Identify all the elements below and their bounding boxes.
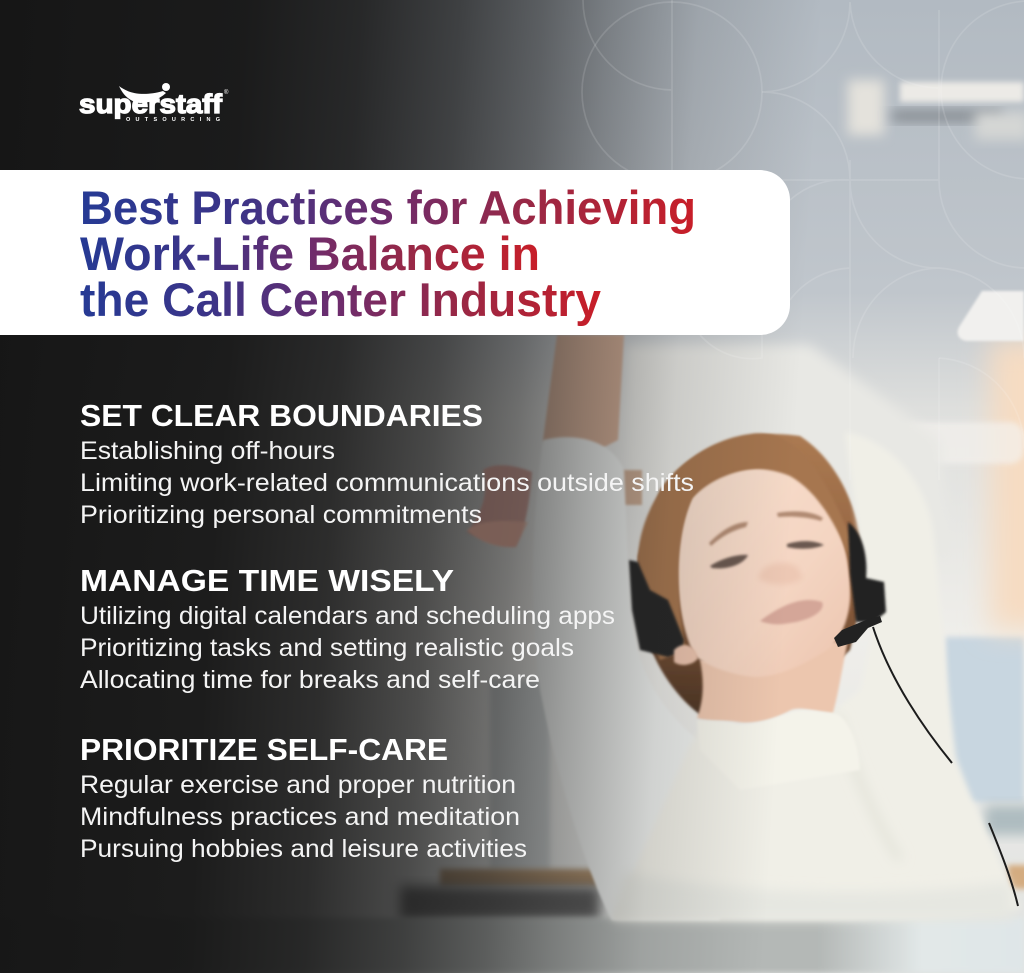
list: Utilizing digital calendars and scheduling apps — [80, 602, 615, 630]
list: Regular exercise and proper nutrition — [80, 771, 516, 799]
hair back — [637, 434, 864, 716]
list: Mindfulness practices and meditation — [80, 803, 520, 831]
decorative line pattern — [582, 0, 1024, 480]
nose — [758, 563, 803, 585]
headset microphone — [834, 616, 882, 647]
headset left cup — [629, 560, 684, 657]
section: set clear boundaries — [80, 398, 694, 529]
list: Allocating time for breaks and self-care — [80, 666, 540, 694]
second hand behind head — [618, 470, 642, 505]
raised forearm — [543, 335, 624, 470]
logo: superstaff outsourcing — [79, 83, 229, 123]
title text: Work-Life Balance in — [80, 227, 540, 280]
title text: the Call Center Industry — [80, 273, 601, 326]
eyebrows — [709, 511, 823, 546]
list: Prioritizing tasks and setting realistic goals — [80, 634, 574, 662]
list: Establishing off-hours — [80, 437, 335, 465]
chair back behind head — [625, 345, 950, 560]
title text: Best Practices for Achieving — [80, 181, 696, 234]
hand behind head — [467, 465, 532, 547]
headset cable — [873, 627, 1018, 906]
logo swoosh — [119, 86, 166, 103]
photo: woman stretching with headset — [533, 335, 1020, 920]
left sleeve — [533, 437, 720, 920]
headset right cup — [848, 522, 886, 622]
list — [80, 602, 615, 694]
list — [80, 771, 527, 863]
neck — [697, 640, 848, 723]
section: prioritize self-care — [80, 732, 527, 863]
sweater collar — [697, 710, 860, 790]
list: Limiting work-related communications outside shifts — [80, 469, 694, 497]
heading: PRIORITIZE SELF-CARE — [80, 732, 448, 767]
face — [678, 468, 850, 677]
title banner — [0, 170, 790, 335]
banner background — [0, 170, 790, 335]
list: Prioritizing personal commitments — [80, 501, 482, 529]
list — [80, 437, 694, 529]
logo tagline: OUTSOURCING — [126, 117, 220, 123]
registered mark: ® — [224, 89, 229, 96]
ear — [674, 645, 698, 665]
torso and right arm — [612, 432, 1020, 920]
logo wordmark: superstaff — [79, 89, 223, 119]
list: Pursuing hobbies and leisure activities — [80, 835, 527, 863]
lips — [760, 600, 823, 624]
eyes — [710, 541, 824, 568]
heading: SET CLEAR BOUNDARIES — [80, 398, 483, 433]
hair front — [638, 433, 862, 660]
section: manage time wisely — [80, 563, 615, 694]
heading: MANAGE TIME WISELY — [80, 563, 454, 598]
sweater fold shading — [612, 872, 1014, 920]
title text — [80, 181, 696, 326]
